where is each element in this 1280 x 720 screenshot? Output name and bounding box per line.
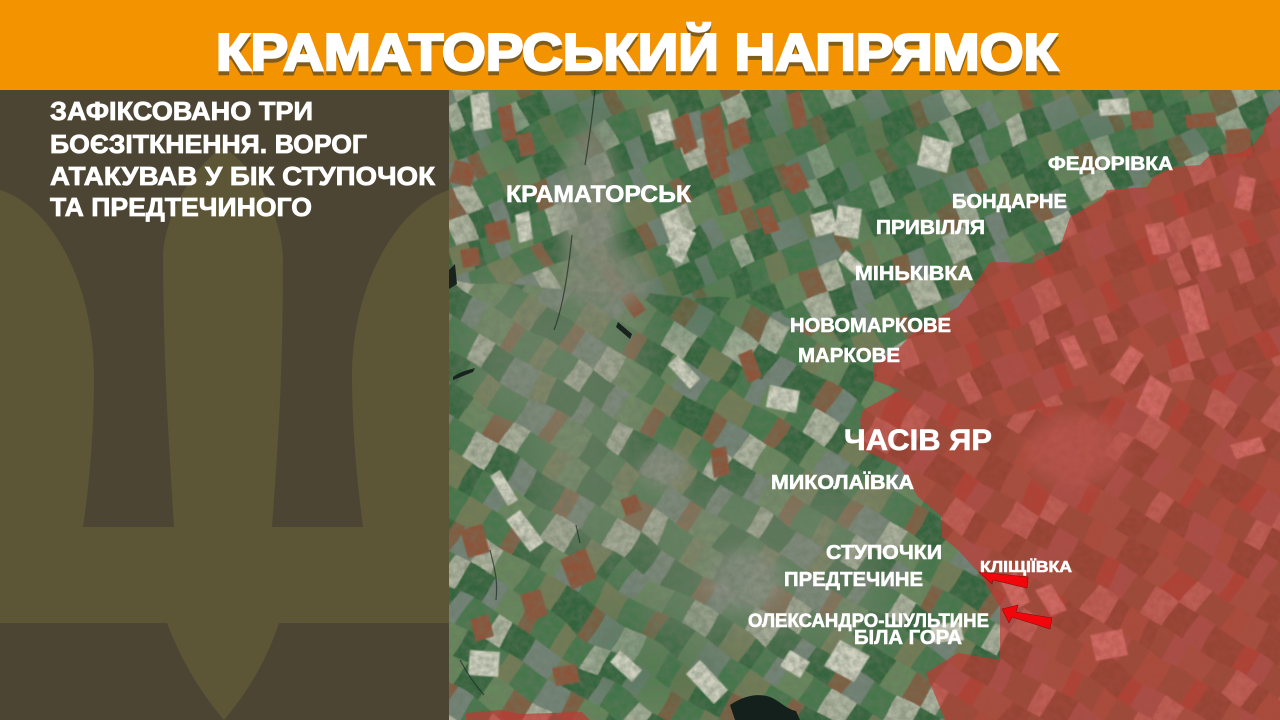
summary text: ЗАФІКСОВАНО ТРИ bbox=[50, 96, 313, 126]
title: КРАМАТОРСЬКИЙ НАПРЯМОК bbox=[216, 23, 1058, 82]
satellite fields bbox=[420, 60, 1280, 720]
tone wash bbox=[449, 90, 1280, 720]
rust fields bbox=[449, 90, 1252, 686]
header bar bbox=[0, 0, 1280, 90]
label: Oleksandro-Shultyne: ОЛЕКСАНДРО-ШУЛЬТИНЕ bbox=[748, 611, 989, 632]
label: Mykolaivka: МИКОЛАЇВКА bbox=[771, 471, 914, 494]
icon: trident emblem bbox=[0, 147, 449, 720]
left panel bbox=[0, 90, 449, 720]
summary text: АТАКУВАВ У БІК СТУПОЧОК bbox=[50, 161, 435, 191]
title: КРАМАТОРСЬКИЙ НАПРЯМОК bbox=[216, 27, 1058, 86]
placed fields bbox=[449, 90, 1266, 704]
label: Markove: МАРКОВЕ bbox=[798, 345, 900, 367]
map bbox=[420, 60, 1280, 720]
label: Novomarkove: НОВОМАРКОВЕ bbox=[790, 315, 951, 337]
label: Chasiv Yar: ЧАСІВ ЯР bbox=[844, 424, 992, 457]
lakes and rivers bbox=[449, 90, 800, 720]
arrow: second attack toward Predtechyne bbox=[1002, 605, 1052, 629]
summary text: БОЄЗІТКНЕННЯ. ВОРОГ bbox=[50, 129, 367, 159]
city grey areas bbox=[560, 124, 1125, 610]
occupied territory bbox=[466, 105, 1280, 720]
red-zone fields bbox=[1000, 175, 1266, 661]
label: Predtechyne: ПРЕДТЕЧИНЕ bbox=[784, 569, 923, 591]
arrow: first attack toward Stupochky bbox=[979, 572, 1028, 588]
pale fields bbox=[468, 92, 1130, 704]
label: Kramatorsk: КРАМАТОРСЬК bbox=[506, 181, 691, 208]
map labels bbox=[506, 154, 1173, 649]
label: Stupochky: СТУПОЧКИ bbox=[826, 542, 942, 564]
summary text bbox=[50, 96, 435, 222]
texture bbox=[449, 90, 1280, 720]
summary text: ТА ПРЕДТЕЧИНОГО bbox=[50, 192, 312, 222]
label: Minkivka: МІНЬКІВКА bbox=[855, 263, 973, 285]
label: Bondarne: БОНДАРНЕ bbox=[952, 191, 1067, 213]
label: Pryvillia: ПРИВІЛЛЯ bbox=[876, 217, 985, 239]
label: Bila Hora: БІЛА ГОРА bbox=[854, 627, 962, 649]
label: Fedorivka: ФЕДОРІВКА bbox=[1048, 154, 1173, 175]
colour zones bbox=[449, 90, 1260, 700]
label: Klishchiivka: КЛІЩІЇВКА bbox=[980, 558, 1072, 576]
